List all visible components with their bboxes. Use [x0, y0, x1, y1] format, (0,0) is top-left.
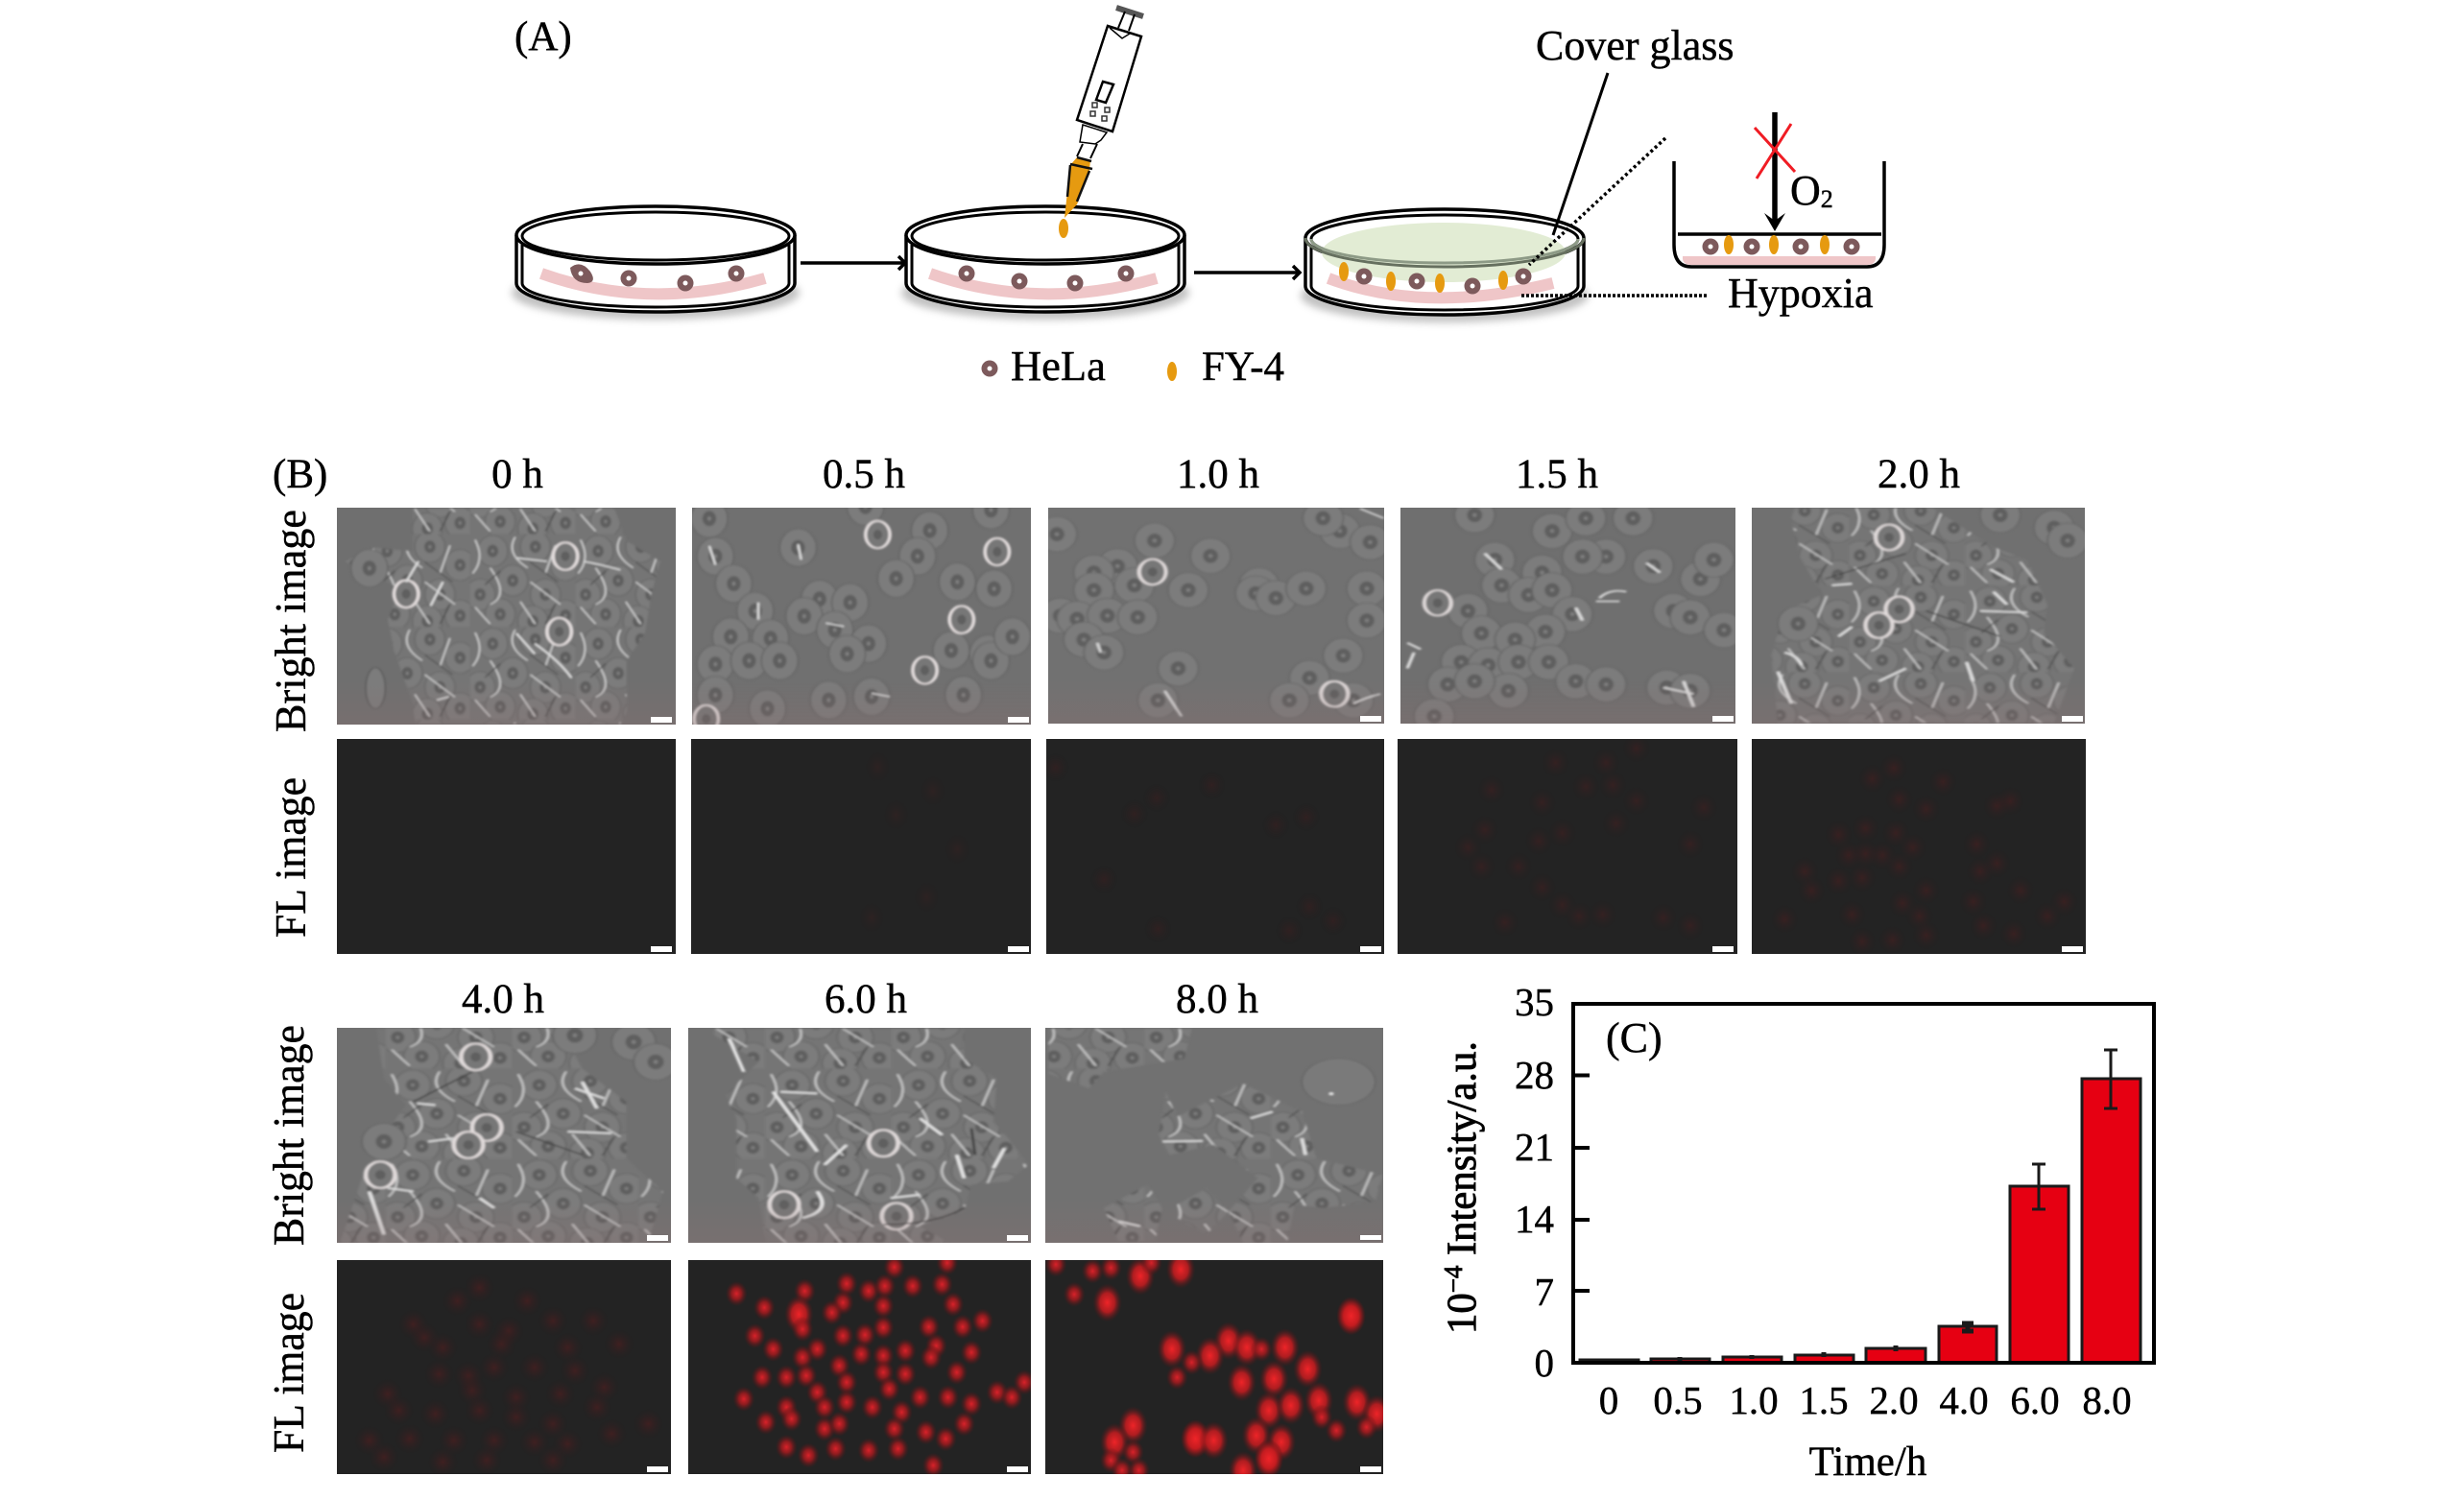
arrow: oxygen blocked	[1755, 112, 1795, 231]
row labels top	[267, 510, 315, 938]
image: bright 2.0 h	[1752, 508, 2085, 724]
column headings row one	[491, 452, 1960, 497]
y axis tick labels: 28	[1515, 1053, 1554, 1097]
arrow: dish two to dish three	[1194, 266, 1300, 279]
panel: A experiment schematic	[512, 8, 1884, 390]
image: fluorescence 6.0 h	[688, 1260, 1031, 1474]
row labels top: FL image	[267, 777, 315, 938]
x axis tick labels: 1.5	[1799, 1378, 1849, 1422]
x axis tick labels: 6.0	[2010, 1378, 2060, 1422]
y axis tick labels: 7	[1534, 1270, 1554, 1314]
heading: panel C label: (C)	[1606, 1014, 1663, 1061]
row labels top: Bright image	[267, 510, 315, 732]
image: bright 0 h	[337, 508, 676, 725]
column headings row two: 6.0 h	[825, 977, 907, 1022]
panel: B microscopy time course	[265, 452, 2088, 1489]
dotted zoom lines	[1521, 138, 1707, 296]
image: fluorescence 2.0 h	[1752, 739, 2086, 954]
y axis title: 10	[1440, 1293, 1485, 1334]
image: fluorescence 1.0 h	[1046, 739, 1384, 954]
x axis tick labels: 8.0	[2082, 1378, 2132, 1422]
label: hypoxia: Hypoxia	[1728, 270, 1874, 317]
image: bright 4.0 h	[337, 1028, 671, 1243]
legend: FY-4	[1202, 345, 1284, 390]
row labels bottom: Bright image	[265, 1025, 313, 1246]
column headings row one: 0.5 h	[823, 452, 905, 497]
icon: culture dish with HeLa cells	[512, 206, 800, 320]
x axis title: Time/h	[1809, 1440, 1926, 1485]
icon: pipette	[1065, 8, 1143, 218]
row labels bottom	[265, 1025, 313, 1453]
error bars	[1680, 1050, 2117, 1361]
chart: C intensity bar chart	[1439, 980, 2154, 1485]
x axis tick labels: 4.0	[1939, 1378, 1989, 1422]
column headings row two	[462, 977, 1258, 1022]
x axis tick labels: 1.0	[1729, 1378, 1779, 1422]
icon: covered dish under hypoxia	[1301, 209, 1589, 322]
column headings row two: 8.0 h	[1176, 977, 1258, 1022]
column headings row one: 1.0 h	[1177, 452, 1259, 497]
column headings row two: 4.0 h	[462, 977, 544, 1022]
image: fluorescence 8.0 h	[1045, 1260, 1383, 1474]
legend: HeLa	[1011, 342, 1106, 390]
x axis tick labels: 0.5	[1653, 1378, 1703, 1422]
column headings row one: 0 h	[491, 452, 543, 497]
image: bright 1.5 h	[1400, 508, 1735, 724]
y axis tick labels: 35	[1515, 980, 1554, 1024]
label: O2: 2	[1821, 185, 1833, 213]
image: bright 6.0 h	[688, 1028, 1031, 1243]
y axis title: −4	[1439, 1265, 1468, 1293]
legend	[981, 342, 1284, 390]
label: cover glass	[1536, 22, 1734, 235]
x axis tick labels: 0	[1599, 1378, 1618, 1422]
label: O2: O	[1790, 167, 1821, 214]
y axis tick labels: 21	[1515, 1125, 1554, 1169]
heading: panel B label: (B)	[273, 452, 327, 497]
column headings row one: 2.0 h	[1878, 452, 1960, 497]
x axis tick labels	[1599, 1378, 2132, 1422]
image: bright 1.0 h	[1048, 508, 1384, 724]
image: bright 8.0 h	[1045, 1028, 1383, 1243]
y axis title: Intensity/a.u.	[1440, 1041, 1485, 1266]
row labels bottom: FL image	[265, 1293, 313, 1453]
label: cover glass: Cover glass	[1536, 22, 1734, 69]
plot frame and ticks	[1573, 1004, 2154, 1363]
inset: hypoxic well	[1674, 112, 1884, 267]
image: fluorescence 4.0 h	[337, 1260, 671, 1474]
y axis tick labels	[1515, 980, 1554, 1385]
y axis tick labels: 14	[1515, 1197, 1554, 1241]
x axis tick labels: 2.0	[1869, 1378, 1919, 1422]
image: fluorescence 0.5 h	[691, 739, 1031, 954]
image: fluorescence 1.5 h	[1398, 739, 1737, 954]
image: fluorescence 0 h	[337, 739, 676, 954]
bars	[1580, 1079, 2141, 1363]
image: bright 0.5 h	[692, 508, 1031, 725]
column headings row one: 1.5 h	[1516, 452, 1598, 497]
y axis tick labels: 0	[1534, 1341, 1554, 1385]
arrow: dish one to dish two	[801, 256, 905, 270]
heading: panel A label: (A)	[514, 14, 572, 60]
icon: culture dish receiving FY-4	[901, 206, 1189, 320]
